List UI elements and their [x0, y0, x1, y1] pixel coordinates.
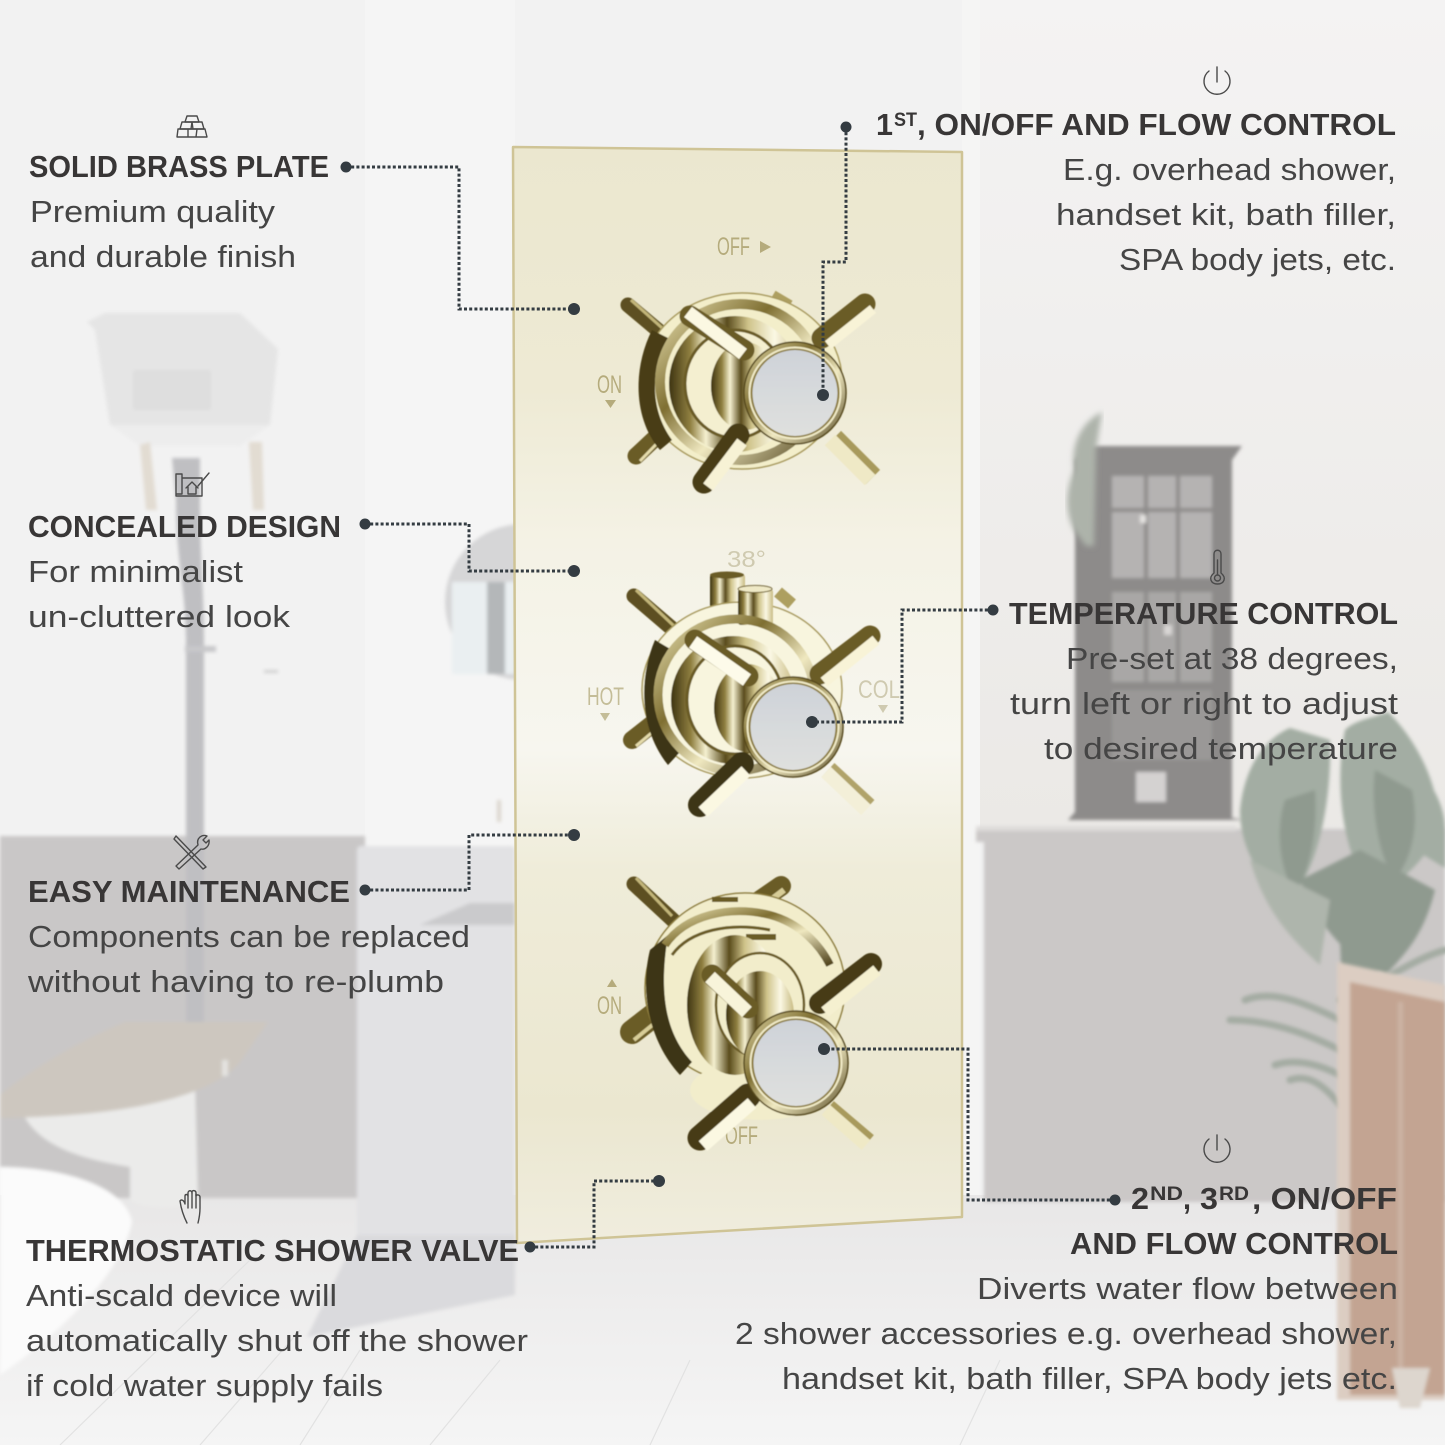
leader: solid brass plate — [340, 162, 580, 315]
heading: second and third on/off and flow control: 3 — [1200, 1181, 1218, 1216]
leader: first on/off control — [817, 122, 852, 401]
icon: house plan and pencil — [176, 473, 209, 496]
top valve handle — [628, 293, 873, 487]
heading: second and third on/off and flow control: AND FLOW CONTROL — [1070, 1226, 1398, 1261]
heading: concealed design: CONCEALED DESIGN — [28, 509, 341, 544]
heading: second and third on/off and flow control: RD — [1219, 1184, 1249, 1205]
heading: solid brass plate: SOLID BRASS PLATE — [29, 149, 329, 184]
heading: easy maintenance: EASY MAINTENANCE — [28, 874, 350, 909]
text: diverts water flow: Diverts water flow between — [977, 1271, 1398, 1306]
text: components replaced: without having to re-plumb — [27, 964, 444, 999]
hook — [497, 800, 501, 822]
wall mirror — [445, 524, 601, 680]
shower valve plate — [513, 147, 962, 1243]
leader: easy maintenance — [360, 829, 580, 896]
text: anti-scald device: automatically shut off the shower — [26, 1323, 528, 1358]
leader: temperature control — [806, 604, 998, 728]
text: minimalist look: For minimalist — [28, 554, 243, 589]
callout: first on/off and flow control — [876, 67, 1396, 277]
bottom valve handle — [632, 878, 877, 1146]
plate marking: top ON — [597, 371, 622, 408]
text: components replaced — [27, 919, 470, 999]
leader: thermostatic shower valve — [524, 1175, 665, 1252]
heading: first on/off and flow control: , ON/OFF AND FLOW CONTROL — [917, 107, 1396, 142]
toilet seat — [0, 1022, 268, 1118]
text: overhead shower examples: E.g. overhead shower, — [1063, 152, 1396, 187]
text: premium quality: and durable finish — [30, 239, 296, 274]
middle thermostatic valve handle — [632, 572, 876, 812]
heading: first on/off and flow control: 1 — [876, 107, 893, 142]
plate marking: COL: COL — [858, 676, 900, 704]
leader: concealed design — [360, 518, 580, 577]
icon: crossed wrench and screwdriver — [174, 835, 209, 869]
cistern tank — [87, 313, 278, 510]
plate marking: HOT: HOT — [587, 683, 624, 711]
toilet bowl — [22, 1080, 198, 1208]
text: diverts water flow: 2 shower accessories e.g. overhead shower, — [735, 1316, 1397, 1351]
plate marking: top ON: ON — [597, 371, 622, 399]
icon: thermometer — [1211, 550, 1224, 584]
plate marking: lower OFF: OFF — [725, 1122, 758, 1150]
callout: temperature control — [1009, 550, 1398, 766]
callout: solid brass plate — [29, 116, 329, 274]
icon: hand — [180, 1191, 200, 1223]
text: anti-scald device — [26, 1278, 528, 1403]
callout: concealed design — [28, 473, 341, 634]
icon: power — [1204, 1135, 1230, 1162]
heading: second and third on/off and flow control: , ON/OFF — [1252, 1181, 1397, 1216]
plate marking: 38 degrees: 38° — [727, 546, 766, 572]
text: anti-scald device: Anti-scald device will — [26, 1278, 337, 1313]
heading: second and third on/off and flow control: ND — [1150, 1184, 1183, 1205]
heading: second and third on/off and flow control: , — [1183, 1181, 1191, 1216]
text: overhead shower examples: SPA body jets, etc. — [1119, 242, 1396, 277]
right dado wall — [976, 829, 1445, 1202]
text: minimalist look: un-cluttered look — [28, 599, 291, 634]
text: components replaced: Components can be replaced — [28, 919, 470, 954]
text: premium quality: Premium quality — [30, 194, 276, 229]
heading: thermostatic shower valve: THERMOSTATIC SHOWER VALVE — [26, 1233, 519, 1268]
plate marking: lower ON — [597, 979, 622, 1020]
centre block and basin — [307, 846, 515, 1337]
small trailing plant — [1067, 412, 1102, 546]
temperature lock pegs — [642, 572, 842, 778]
text: minimalist look — [28, 554, 291, 634]
text: pre-set at 38 degrees: Pre-set at 38 degrees, — [1066, 641, 1398, 676]
icon: stacked brass bars — [177, 116, 207, 137]
plate marking: top OFF: OFF — [717, 233, 750, 261]
heading: second and third on/off and flow control: 2 — [1131, 1181, 1149, 1216]
leader: second and third on/off control — [818, 1043, 1120, 1206]
left dado wall — [0, 836, 365, 1198]
text: overhead shower examples — [1056, 152, 1396, 277]
heading: second and third on/off and flow control — [1070, 1181, 1398, 1261]
big plant leaves — [1230, 712, 1445, 1105]
plate marking: lower ON: ON — [597, 992, 622, 1020]
icon: power — [1204, 67, 1230, 94]
text: diverts water flow — [735, 1271, 1398, 1396]
text: pre-set at 38 degrees: turn left or right to adjust — [1010, 686, 1398, 721]
roll top bath — [0, 1167, 132, 1375]
text: overhead shower examples: handset kit, bath filler, — [1056, 197, 1396, 232]
display cabinet — [1068, 446, 1245, 820]
callout: easy maintenance — [27, 835, 470, 999]
text: pre-set at 38 degrees — [1010, 641, 1398, 766]
text: pre-set at 38 degrees: to desired temperature — [1044, 731, 1398, 766]
wood cabinet — [1337, 962, 1445, 1408]
plate marking: HOT — [587, 683, 624, 721]
text: premium quality — [30, 194, 296, 274]
callout: thermostatic shower valve — [26, 1191, 528, 1403]
heading: temperature control: TEMPERATURE CONTROL — [1009, 596, 1398, 631]
flush pipe — [172, 458, 204, 1022]
heading: first on/off and flow control: ST — [894, 110, 917, 131]
text: anti-scald device: if cold water supply fails — [26, 1368, 383, 1403]
plate marking: COL — [858, 676, 900, 713]
text: diverts water flow: handset kit, bath filler, SPA body jets etc. — [782, 1361, 1397, 1396]
callout: second and third on/off control — [735, 1135, 1398, 1396]
